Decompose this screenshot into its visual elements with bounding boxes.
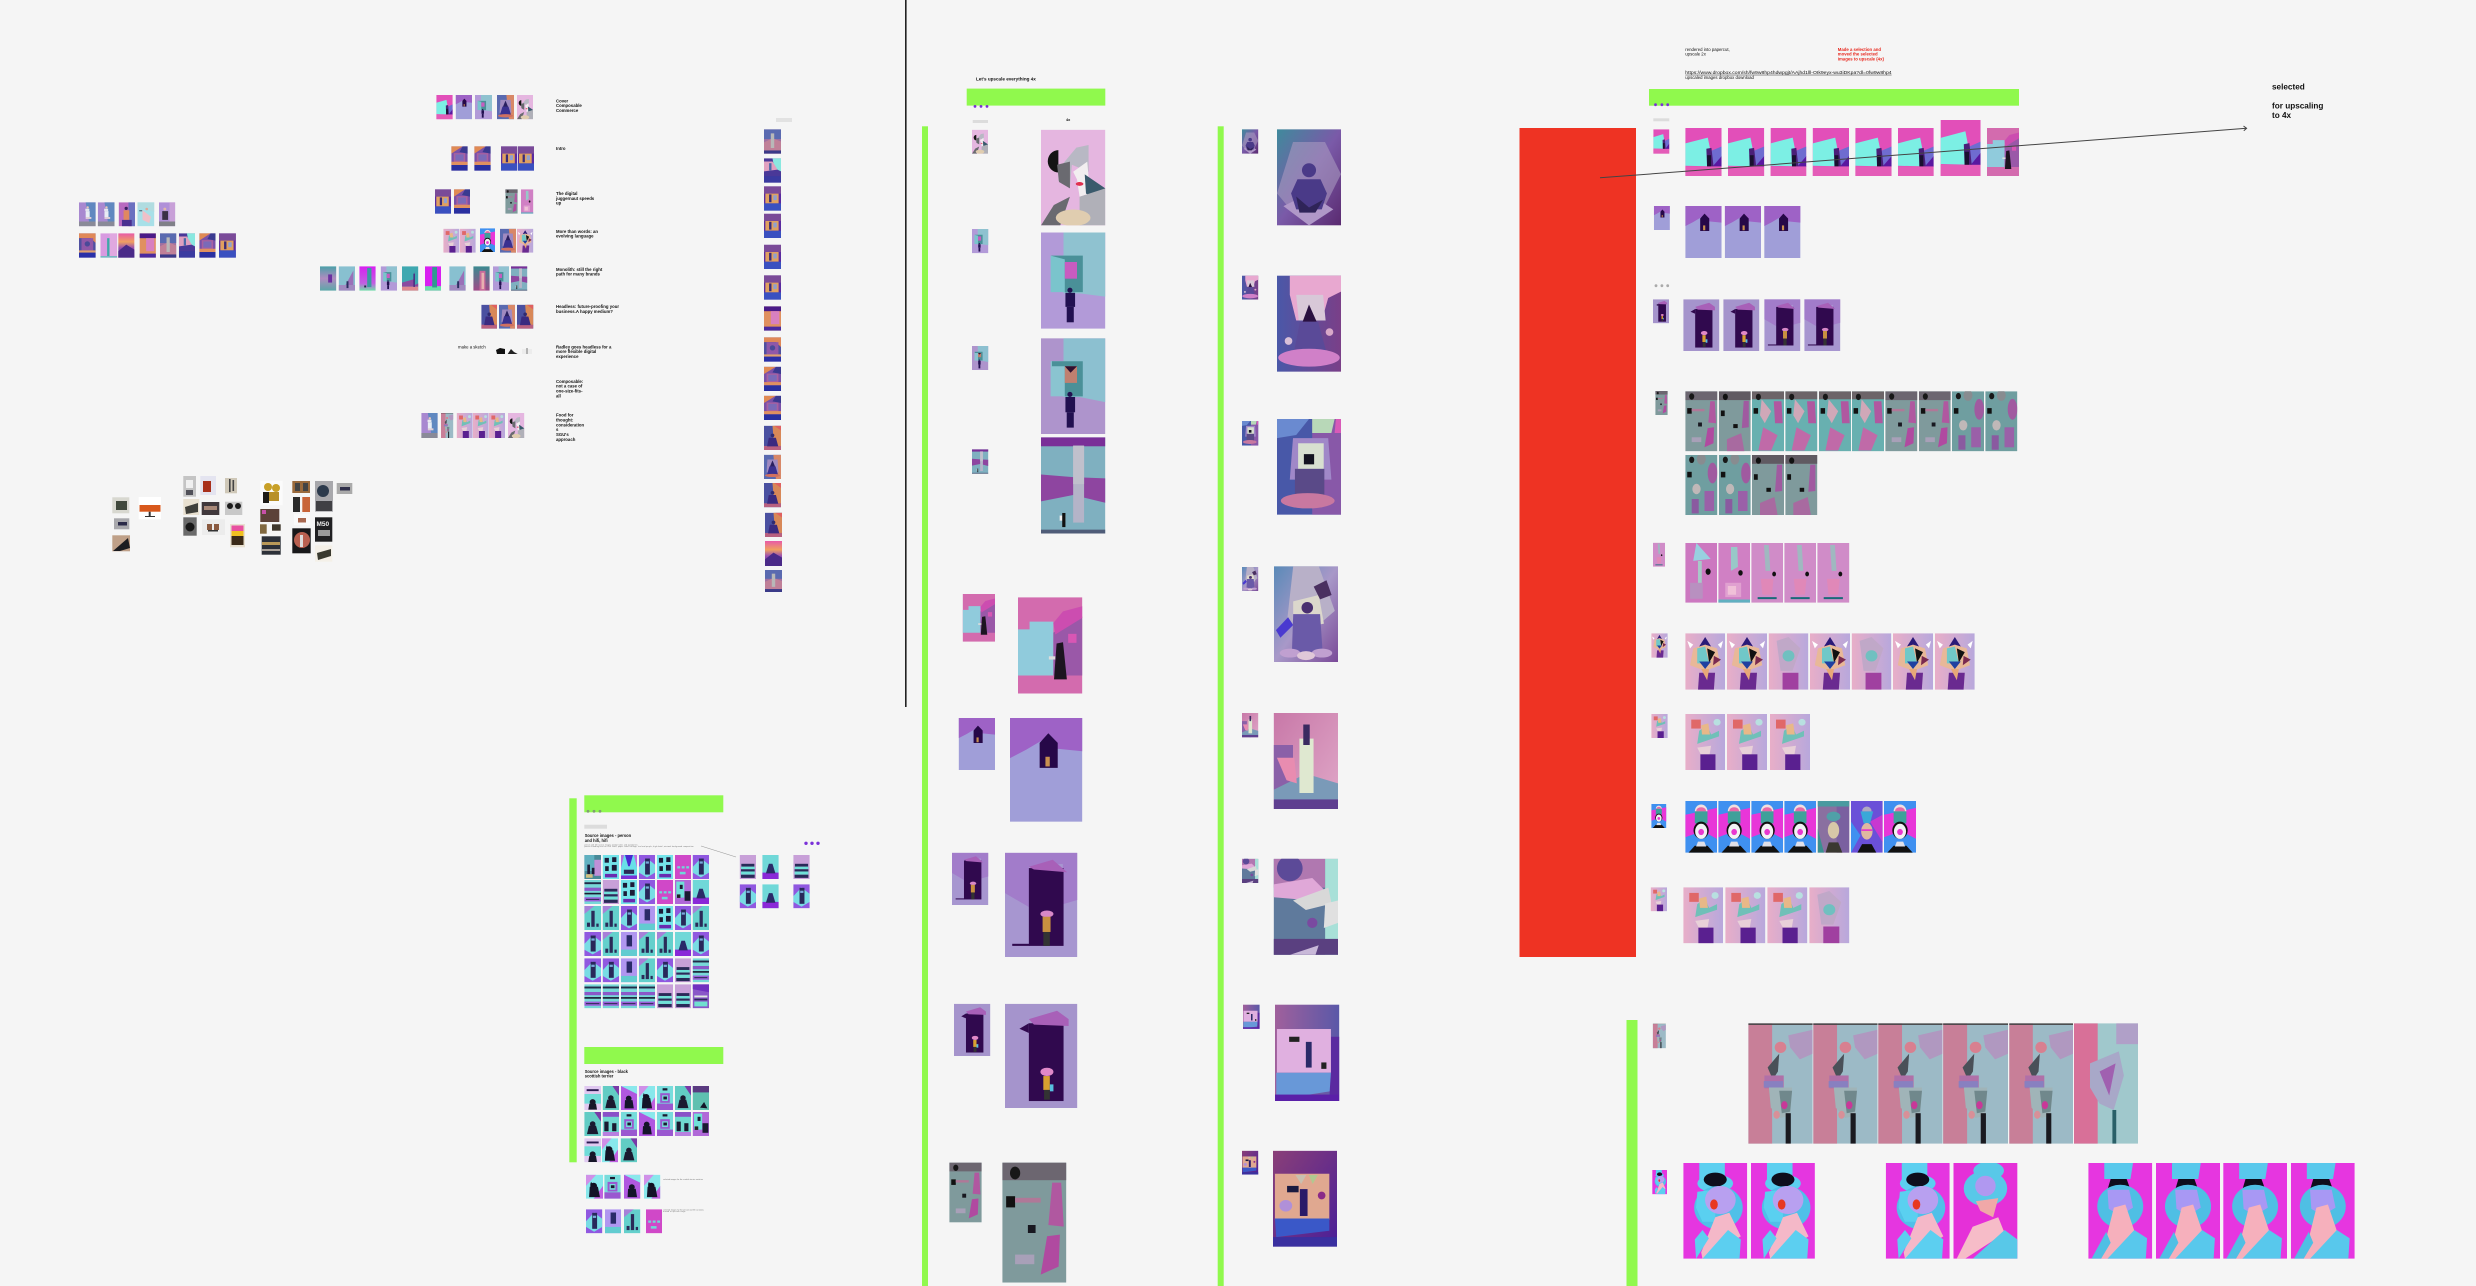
panel: upscale 4x, column two: [1218, 126, 1341, 1286]
pair: figure with clouds: [1242, 566, 1338, 662]
row: blue profile portraits: [1652, 1162, 2355, 1259]
row: Food for thought: [421, 412, 585, 442]
selected hi-fi pairs: [740, 855, 810, 908]
row 3: tall door variations: [1653, 299, 1840, 351]
label: Intro: [556, 146, 566, 151]
image grid: hi-fi: [584, 855, 709, 1008]
column label: 4x: [1066, 118, 1071, 122]
tag: [1653, 118, 1669, 121]
row 6: geometric diamonds: [1651, 633, 1975, 690]
note: rendered into papercut: rendered into papercut,: [1685, 47, 1730, 52]
row 2: window variations: [1654, 206, 1800, 258]
status dots: [974, 105, 988, 108]
row: Radley: [458, 344, 612, 359]
row: More than words: [443, 228, 598, 253]
accent rail: [922, 126, 928, 1286]
pair: grey column: [972, 437, 1105, 534]
accent rail: [1218, 126, 1224, 1286]
pair: gallery pink: [1243, 1005, 1339, 1101]
note: selected for upscaling: to 4x: [2272, 111, 2292, 120]
label: s: [556, 427, 559, 432]
thumbnails: [451, 146, 534, 171]
pair: paper collage portrait: [972, 130, 1105, 226]
accent rail: [1626, 1020, 1638, 1286]
thumbnails: [481, 305, 533, 329]
panel: hi-fi reference photo collage: M50: [316, 521, 330, 528]
note: selected images for the scottish terrier variation: [663, 1178, 703, 1181]
row: Monolith: [320, 266, 603, 291]
note two: selected images for the person and hifi variation,: [663, 1208, 705, 1211]
row: statue heads: [1653, 1023, 2138, 1144]
pair: abstract shapes: [1242, 856, 1338, 955]
status dots: [1654, 103, 1669, 106]
divider: black vertical rule: [905, 0, 907, 707]
row: Composable label: one-size-fits-: [556, 388, 583, 394]
pair: seated figure teal: [1242, 129, 1341, 225]
row: Headless: [481, 304, 619, 329]
thumbnails: [320, 266, 527, 291]
label: consideration: [556, 422, 585, 428]
pair: person at pink window: [972, 229, 1105, 329]
section banner: [584, 795, 723, 812]
note: selection instructions: images to upscale (4x): [1838, 56, 1884, 62]
row 7: geometric torso: [1651, 714, 1810, 770]
label: up: [556, 201, 562, 206]
heading: Source images - person: [585, 833, 631, 838]
arrow: selection to upscale note: [1600, 126, 2247, 178]
label: evolving language: [556, 234, 594, 238]
thumbnails: [436, 95, 533, 119]
accent rail: [569, 798, 577, 1162]
tag: [584, 825, 607, 829]
thumbnails: [421, 413, 524, 438]
row: The digital juggernaut: [435, 189, 595, 214]
row: Intro: [451, 146, 566, 171]
note: rendered into papercut: upscale 2x: [1685, 52, 1707, 56]
row 4: teal paper figures: [1655, 390, 2017, 515]
panel: article section list: [320, 95, 619, 442]
panel: selected for 4x upscaling: [1626, 1020, 2355, 1286]
thumbnail row: illustrated people at desks: [79, 202, 175, 226]
pair: gallery orange: [1242, 1151, 1337, 1247]
row: Composable label: all: [556, 394, 561, 398]
label: Headless: future-proofing your: [556, 304, 619, 309]
row: Cover: [436, 95, 582, 119]
selected hi-fi row: [586, 1209, 662, 1233]
status dots: [587, 810, 601, 813]
pair: seated figure pink: [1242, 276, 1341, 372]
heading: Let's upscale everything 4x: [976, 76, 1036, 81]
panel: vertical strip of source posters: [764, 118, 792, 592]
label: Food for: [556, 412, 573, 418]
label: business.A happy medium?: [556, 309, 613, 314]
pair: figure at monitor: [1242, 419, 1341, 515]
label: juggernaut speeds: [555, 196, 595, 201]
heading: and hifi, hifi: [585, 838, 608, 843]
thumbnail row: gradient posters: [79, 233, 236, 258]
label: More than words: an: [556, 229, 598, 234]
pair: lavender window: [959, 718, 1082, 822]
label: Monolith: still the right: [556, 267, 602, 272]
row 1: walker variations: [1653, 120, 2019, 176]
thumbnails: [435, 189, 533, 214]
prompt note line two: person standing next to a hifi stack, paper cutout collage, teal and purple, high detail, minimal background composition: [584, 845, 694, 848]
heading two: Source images - black: [585, 1069, 628, 1074]
label: experience: [556, 354, 579, 359]
note: selection instructions: moved the selected: [1838, 52, 1878, 56]
row 5: pink paper figures: [1653, 543, 1849, 603]
panel: upscale 4x, column one: [922, 76, 1105, 1286]
note: selection instructions: Made a selection and: [1838, 47, 1881, 52]
status dots: grey: [1655, 284, 1669, 287]
label: more flexible digital: [556, 349, 596, 354]
tag: [776, 118, 792, 122]
pair: teal paper figures: [949, 1163, 1066, 1283]
panel: papercut upscale 2x: [1649, 47, 2019, 943]
row: Composable label: Composable:: [556, 379, 583, 384]
label: Composable: [556, 103, 582, 108]
thumbnails: [443, 228, 533, 253]
note two line two: moved to upscale stage: [663, 1210, 685, 1213]
label: Radley goes headless for a: [556, 344, 611, 350]
label: approach: [556, 437, 576, 442]
section banner: [967, 89, 1105, 106]
row: Composable label: not a case of: [556, 384, 583, 388]
label: SGU's: [556, 432, 569, 437]
label: The digital: [556, 191, 578, 196]
pair: white tower: [1242, 713, 1338, 809]
label: Cover: [556, 98, 568, 104]
prompt note: person and hifi source images prompt notes and parameters: [584, 843, 638, 846]
selected terrier row: [586, 1175, 660, 1199]
row 8: blue and magenta faces: [1651, 801, 1916, 853]
pair: person at brown window: [972, 338, 1105, 434]
link caption: upscaled images dropbox download: [1685, 75, 1754, 80]
image grid: terrier: [584, 1086, 709, 1162]
pair: tall dark door two: [954, 1004, 1077, 1108]
pair: walker by pink wall: [963, 594, 1082, 694]
heading two: scottish terrier: [585, 1074, 614, 1078]
label: thought:: [556, 418, 574, 422]
section banner: [1649, 89, 2019, 106]
row 9: torso with red square: [1651, 887, 1849, 943]
link: https://www.dropbox.com/sh/fw9w8hp4hdwpgjt/AAjhd1lll-OIk9eyx-wu3iDKpa?dl=0fw9w8hp4: [1685, 70, 1892, 75]
panel: hi-fi source images: [569, 795, 820, 1233]
note: selected for upscaling: selected: [2272, 82, 2305, 92]
label: path for many brands: [556, 272, 601, 276]
panel: early reference thumbnails, left: [79, 202, 236, 258]
connector line: [701, 846, 736, 857]
red selection block: [1520, 128, 1636, 957]
sketch glyphs: [496, 348, 532, 354]
note: selected for upscaling: for upscaling: [2272, 102, 2323, 110]
sketch note: make a sketch: [458, 344, 486, 350]
label: Commerce: [556, 108, 579, 113]
status dots: purple: [804, 842, 820, 845]
tag: [973, 120, 988, 123]
panel: hi-fi reference photo collage: [112, 476, 352, 562]
section banner two: [584, 1047, 723, 1064]
pair: tall dark door one: [952, 853, 1077, 957]
